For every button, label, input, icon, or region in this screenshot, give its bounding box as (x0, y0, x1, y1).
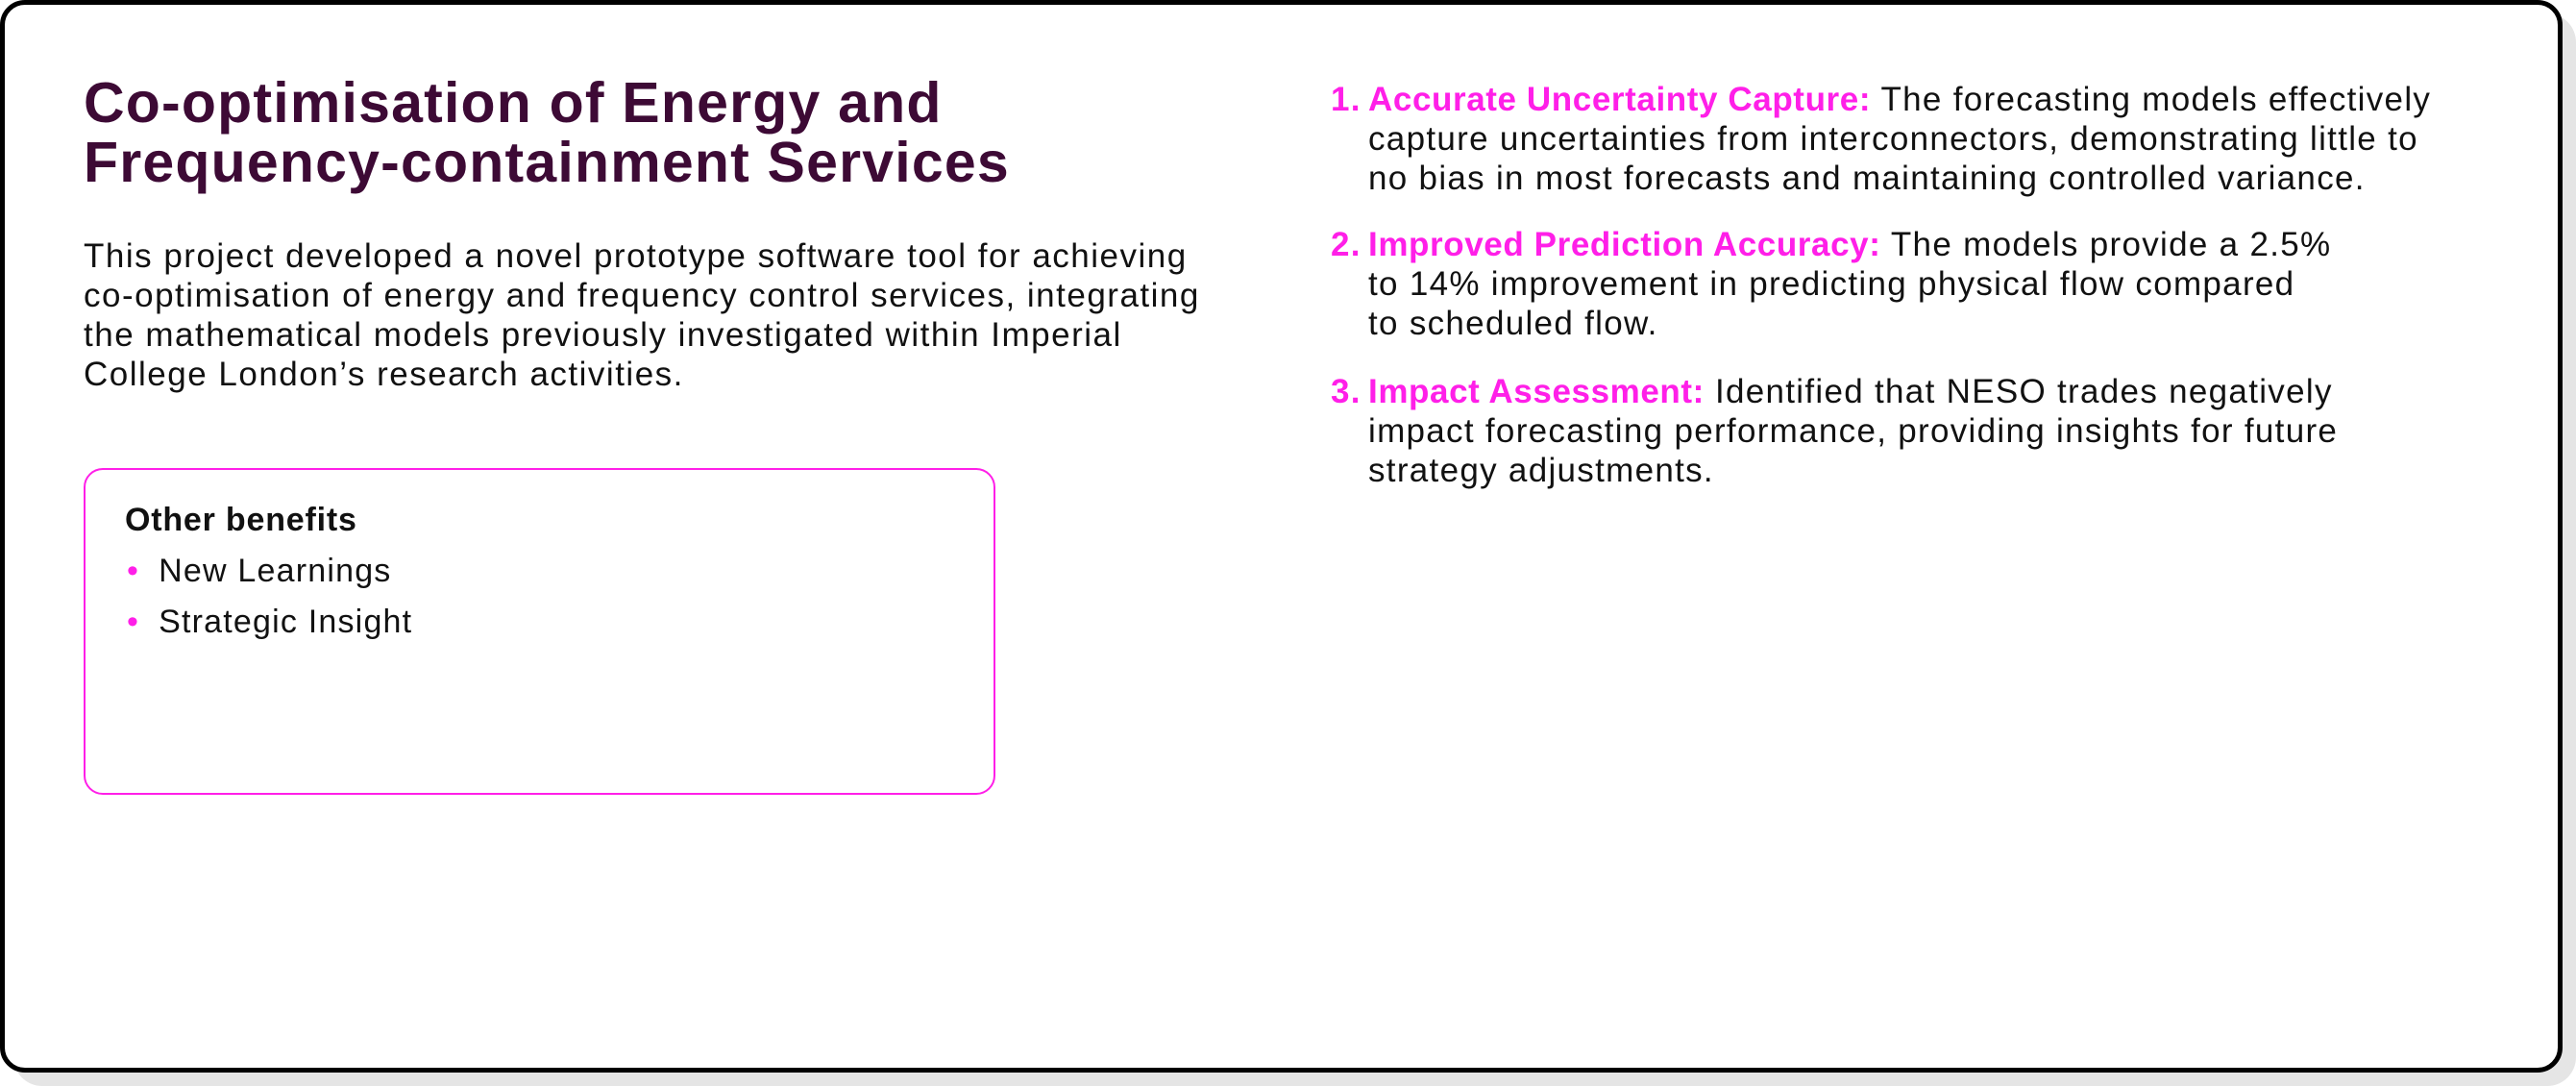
title: Co-optimisation of Energy and (84, 71, 943, 135)
title (84, 71, 1010, 194)
intro paragraph: This project developed a novel prototype software tool for achieving (84, 237, 1188, 275)
finding 2: 2. (1331, 226, 1362, 263)
finding 3: 3. (1331, 373, 1362, 410)
finding 1: no bias in most forecasts and maintaining controlled variance. (1368, 160, 2366, 197)
finding 2: to 14% improvement in predicting physical flow compared (1368, 265, 2294, 303)
finding 1: 1. (1331, 81, 1362, 118)
bullet: strategic insight: • Strategic Insight (127, 604, 412, 640)
finding 1 (1331, 81, 2431, 197)
finding 3 (1331, 373, 2338, 489)
heading: other benefits: Other benefits (125, 502, 357, 538)
bullet: new learnings: • New Learnings (127, 553, 392, 589)
intro paragraph (84, 237, 1200, 393)
finding 1: Accurate Uncertainty Capture: The forecasting models effectively (1368, 81, 2431, 118)
finding 3: strategy adjustments. (1368, 452, 1714, 489)
finding 1: capture uncertainties from interconnectors, demonstrating little to (1368, 120, 2418, 158)
intro paragraph: co-optimisation of energy and frequency control services, integrating (84, 277, 1200, 314)
finding 3: impact forecasting performance, providing insights for future (1368, 412, 2338, 450)
finding 2: Improved Prediction Accuracy: The models provide a 2.5% (1368, 226, 2331, 263)
finding 2: to scheduled flow. (1368, 305, 1658, 342)
intro paragraph: the mathematical models previously investigated within Imperial (84, 316, 1122, 354)
intro paragraph: College London’s research activities. (84, 356, 684, 393)
finding 2 (1331, 226, 2331, 342)
panel: other benefits (84, 468, 995, 795)
title: Frequency-containment Services (84, 131, 1010, 194)
finding 3: Impact Assessment: Identified that NESO trades negatively (1368, 373, 2333, 410)
